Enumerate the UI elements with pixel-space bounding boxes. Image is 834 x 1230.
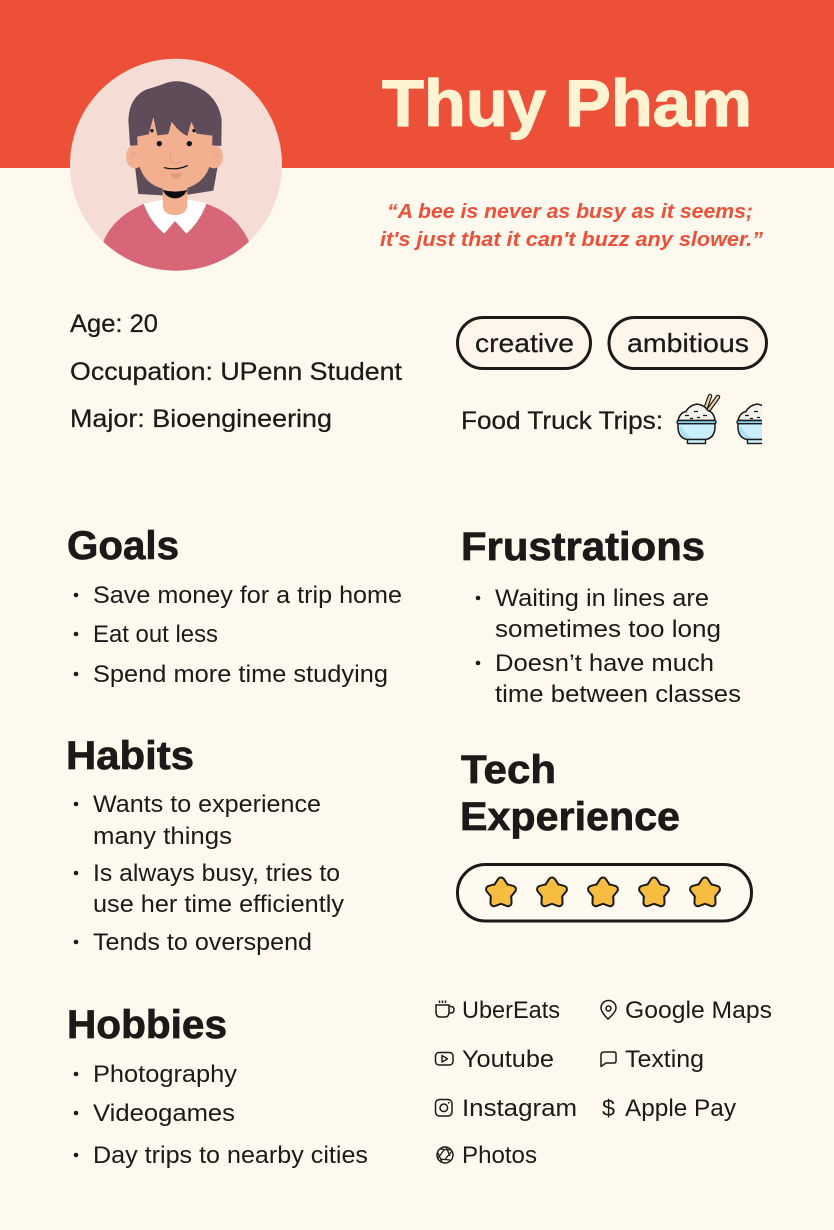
list: habits bbox=[74, 791, 344, 956]
icon: rice bowls bbox=[677, 396, 776, 444]
tag: ambitious bbox=[609, 318, 766, 368]
rating: five stars bbox=[458, 864, 752, 921]
demographics bbox=[70, 310, 402, 433]
app: Apple Pay: Apple Pay bbox=[625, 1095, 736, 1122]
list: habits: many things bbox=[93, 823, 232, 850]
heading: tech experience: Tech bbox=[461, 748, 556, 792]
list: habits: use her time efficiently bbox=[93, 891, 344, 918]
list: hobbies: Day trips to nearby cities bbox=[93, 1142, 368, 1169]
quote bbox=[380, 201, 763, 251]
app: Youtube: Youtube bbox=[462, 1046, 554, 1073]
list: hobbies bbox=[74, 1061, 368, 1169]
app: Google Maps: Google Maps bbox=[625, 997, 772, 1024]
heading: hobbies: Hobbies bbox=[67, 1003, 227, 1047]
food truck trips label: Food Truck Trips: bbox=[461, 407, 663, 435]
title: Thuy Pham bbox=[382, 66, 752, 140]
quote: it's just that it can't buzz any slower.” bbox=[380, 229, 763, 251]
app: UberEats: UberEats bbox=[462, 997, 560, 1024]
quote: “A bee is never as busy as it seems; bbox=[387, 201, 753, 223]
tag: ambitious: ambitious bbox=[627, 328, 749, 358]
list: frustrations: time between classes bbox=[495, 681, 741, 708]
app: Apple Pay: $ bbox=[602, 1095, 615, 1121]
demographics: Age: 20 bbox=[70, 310, 158, 338]
list: goals: Save money for a trip home bbox=[93, 582, 402, 609]
list: habits: Is always busy, tries to bbox=[93, 860, 340, 887]
list: hobbies: Videogames bbox=[93, 1100, 235, 1127]
demographics: Occupation: UPenn Student bbox=[70, 358, 402, 386]
list: goals bbox=[74, 582, 402, 688]
list: frustrations bbox=[476, 585, 741, 708]
list: frustrations: sometimes too long bbox=[495, 616, 721, 643]
list: habits: Wants to experience bbox=[93, 791, 321, 818]
app: Instagram: Instagram bbox=[462, 1095, 577, 1122]
demographics: Major: Bioengineering bbox=[70, 405, 332, 433]
app: Photos: Photos bbox=[462, 1142, 537, 1169]
list: frustrations: Doesn’t have much bbox=[495, 650, 714, 677]
heading: tech experience: Experience bbox=[460, 795, 680, 839]
heading: frustrations: Frustrations bbox=[461, 525, 705, 569]
heading: tech experience bbox=[460, 748, 680, 839]
list: habits: Tends to overspend bbox=[93, 929, 312, 956]
tag: creative bbox=[458, 318, 590, 368]
tag: creative: creative bbox=[475, 328, 574, 358]
heading: habits: Habits bbox=[66, 734, 194, 778]
app: Texting: Texting bbox=[625, 1046, 704, 1073]
list: frustrations: Waiting in lines are bbox=[495, 585, 709, 612]
list: hobbies: Photography bbox=[93, 1061, 237, 1088]
heading: goals: Goals bbox=[67, 524, 179, 568]
list: goals: Eat out less bbox=[93, 621, 218, 648]
header band bbox=[0, 0, 834, 168]
list: goals: Spend more time studying bbox=[93, 661, 388, 688]
avatar portrait bbox=[70, 59, 282, 280]
